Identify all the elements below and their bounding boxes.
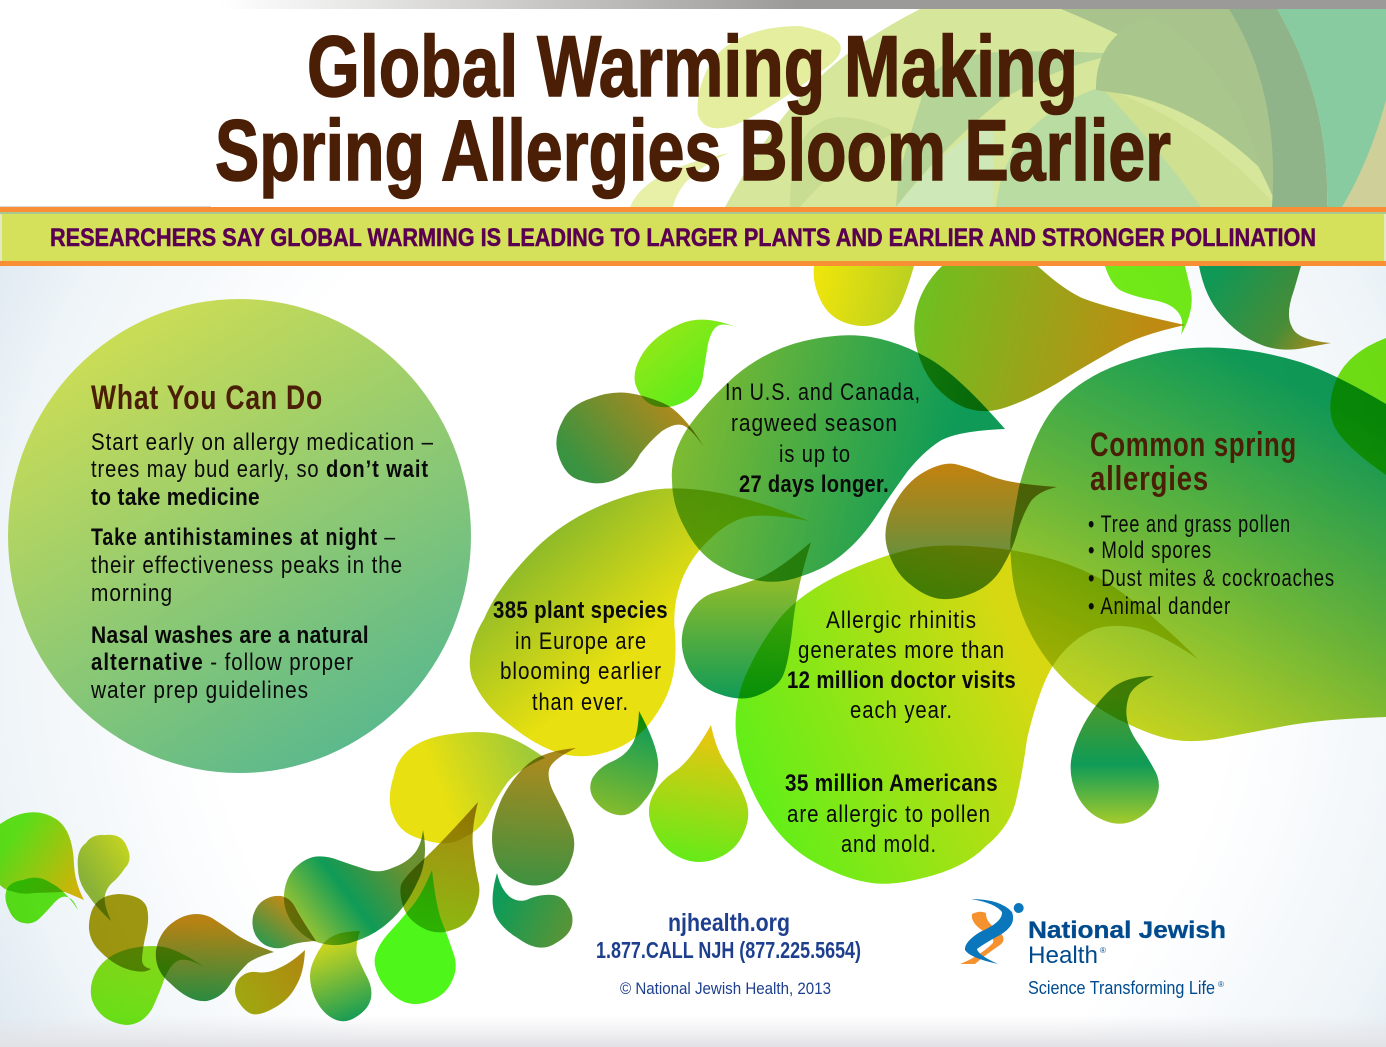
- text block: common spring allergies: [1088, 426, 1335, 620]
- title: Global Warming Making: [307, 19, 1078, 115]
- droplet: ragweed: [672, 335, 1005, 582]
- text block: allergic rhinitis: [787, 607, 1016, 724]
- text block: 35 million Americans: 35 million Americans: [785, 770, 998, 797]
- text block: allergic rhinitis: 12 million doctor visits: [787, 667, 1016, 694]
- text block: allergic rhinitis: each year.: [850, 697, 953, 724]
- leaf: lime left edge: [5, 878, 78, 923]
- text block: what you can do: [90, 379, 434, 704]
- heading: what you can do: What You Can Do: [91, 379, 323, 417]
- text block: what you can do: their effectiveness peaks in the: [91, 552, 403, 579]
- header leaf pattern: [630, 9, 1386, 207]
- leaf: bright green top: [635, 320, 743, 407]
- leaf: olive left: [556, 393, 704, 483]
- droplet: green wave: [284, 830, 425, 945]
- allergy list: • Animal dander: [1088, 593, 1231, 620]
- leaf: bright green under banner: [1103, 250, 1192, 335]
- heading: common spring allergies: Common spring: [1090, 426, 1297, 464]
- contact details: [596, 909, 861, 998]
- heading: common spring allergies: allergies: [1090, 460, 1209, 498]
- text block: 35 million Americans: are allergic to pollen: [787, 801, 991, 828]
- text block: what you can do: trees may bud early, so don’t wait: [91, 456, 429, 483]
- leaf: small olive: [235, 950, 305, 1014]
- text block: what you can do: water prep guidelines: [90, 677, 309, 704]
- leaf: amber green: [156, 914, 274, 1001]
- contact details: 1.877.CALL NJH (877.225.5654): [596, 937, 861, 963]
- contact details: © National Jewish Health, 2013: [620, 979, 831, 998]
- text block: ragweed season: is up to: [779, 441, 851, 468]
- droplet: plant species: [470, 488, 809, 756]
- text block: ragweed season: 27 days longer.: [739, 471, 889, 498]
- text block: what you can do: alternative - follow proper: [91, 649, 354, 676]
- text block: ragweed season: In U.S. and Canada,: [725, 379, 921, 406]
- droplet: lime lower left: [91, 946, 204, 1025]
- droplet: amber olive: [400, 802, 479, 932]
- logo: National Jewish Health: Science Transforming Life: [1028, 978, 1215, 998]
- leaf: amber centre: [885, 464, 1057, 599]
- text block: ragweed season: ragweed season: [731, 410, 898, 437]
- text block: plant species: blooming earlier: [500, 658, 662, 685]
- droplet: olive green: [492, 748, 576, 886]
- droplet: olive lower left: [89, 894, 151, 972]
- text block: 35 million Americans: [785, 770, 998, 858]
- header background: [0, 0, 1386, 207]
- droplet: large yellow: [390, 732, 545, 843]
- droplet: allergic rhinitis: [736, 546, 1198, 884]
- text block: what you can do: Take antihistamines at night –: [91, 524, 396, 551]
- text block: what you can do: Nasal washes are a natural: [91, 622, 369, 649]
- droplet: left edge: [0, 812, 84, 900]
- text block: plant species: [493, 597, 668, 716]
- text block: allergic rhinitis: Allergic rhinitis: [826, 607, 977, 634]
- logo: National Jewish Health: [960, 899, 1226, 998]
- text block: what you can do: morning: [91, 580, 173, 607]
- droplet: teal lower right: [1071, 676, 1159, 824]
- logo: National Jewish Health: ®: [1218, 980, 1224, 989]
- leaf: teal: [493, 873, 572, 948]
- heading: common spring allergies: [1090, 426, 1297, 498]
- text block: what you can do: to take medicine: [91, 484, 260, 511]
- text block: plant species: in Europe are: [515, 628, 647, 655]
- droplet: common allergies: [1010, 348, 1386, 741]
- droplet: small green: [590, 711, 658, 815]
- text block: what you can do: Start early on allergy medication –: [91, 429, 434, 456]
- allergy list: • Mold spores: [1088, 537, 1212, 564]
- contact details: njhealth.org: [668, 909, 790, 937]
- droplet: olive under banner: [914, 250, 1185, 411]
- allergy list: • Tree and grass pollen: [1088, 511, 1291, 538]
- droplet: yellow under banner: [814, 250, 918, 326]
- leaf: teal under banner: [1197, 250, 1331, 350]
- icon: helix: [960, 899, 1024, 964]
- text block: 35 million Americans: and mold.: [841, 831, 937, 858]
- leaf: bright green right edge: [1330, 338, 1386, 475]
- leaf: small amber: [252, 896, 316, 948]
- logo: National Jewish Health: Health: [1028, 942, 1098, 969]
- logo: National Jewish Health: National Jewish: [1028, 917, 1226, 944]
- panel: what you can do circle: [8, 299, 471, 773]
- text block: plant species: 385 plant species: [493, 597, 668, 624]
- droplet: yellow green: [649, 725, 748, 862]
- title: [215, 19, 1171, 199]
- allergy list: [1088, 511, 1335, 620]
- banner: [0, 207, 1386, 266]
- panel: decorative droplet cluster: [0, 250, 1386, 1025]
- text block: allergic rhinitis: generates more than: [798, 637, 1005, 664]
- leaf: green centre: [682, 542, 811, 698]
- logo: National Jewish Health: ®: [1100, 946, 1106, 955]
- droplet: small yellow green: [78, 835, 130, 921]
- droplet: yellow teal: [310, 931, 371, 1021]
- text block: ragweed season: [725, 379, 921, 498]
- droplet: neon green: [375, 870, 456, 1004]
- text block: plant species: than ever.: [532, 689, 629, 716]
